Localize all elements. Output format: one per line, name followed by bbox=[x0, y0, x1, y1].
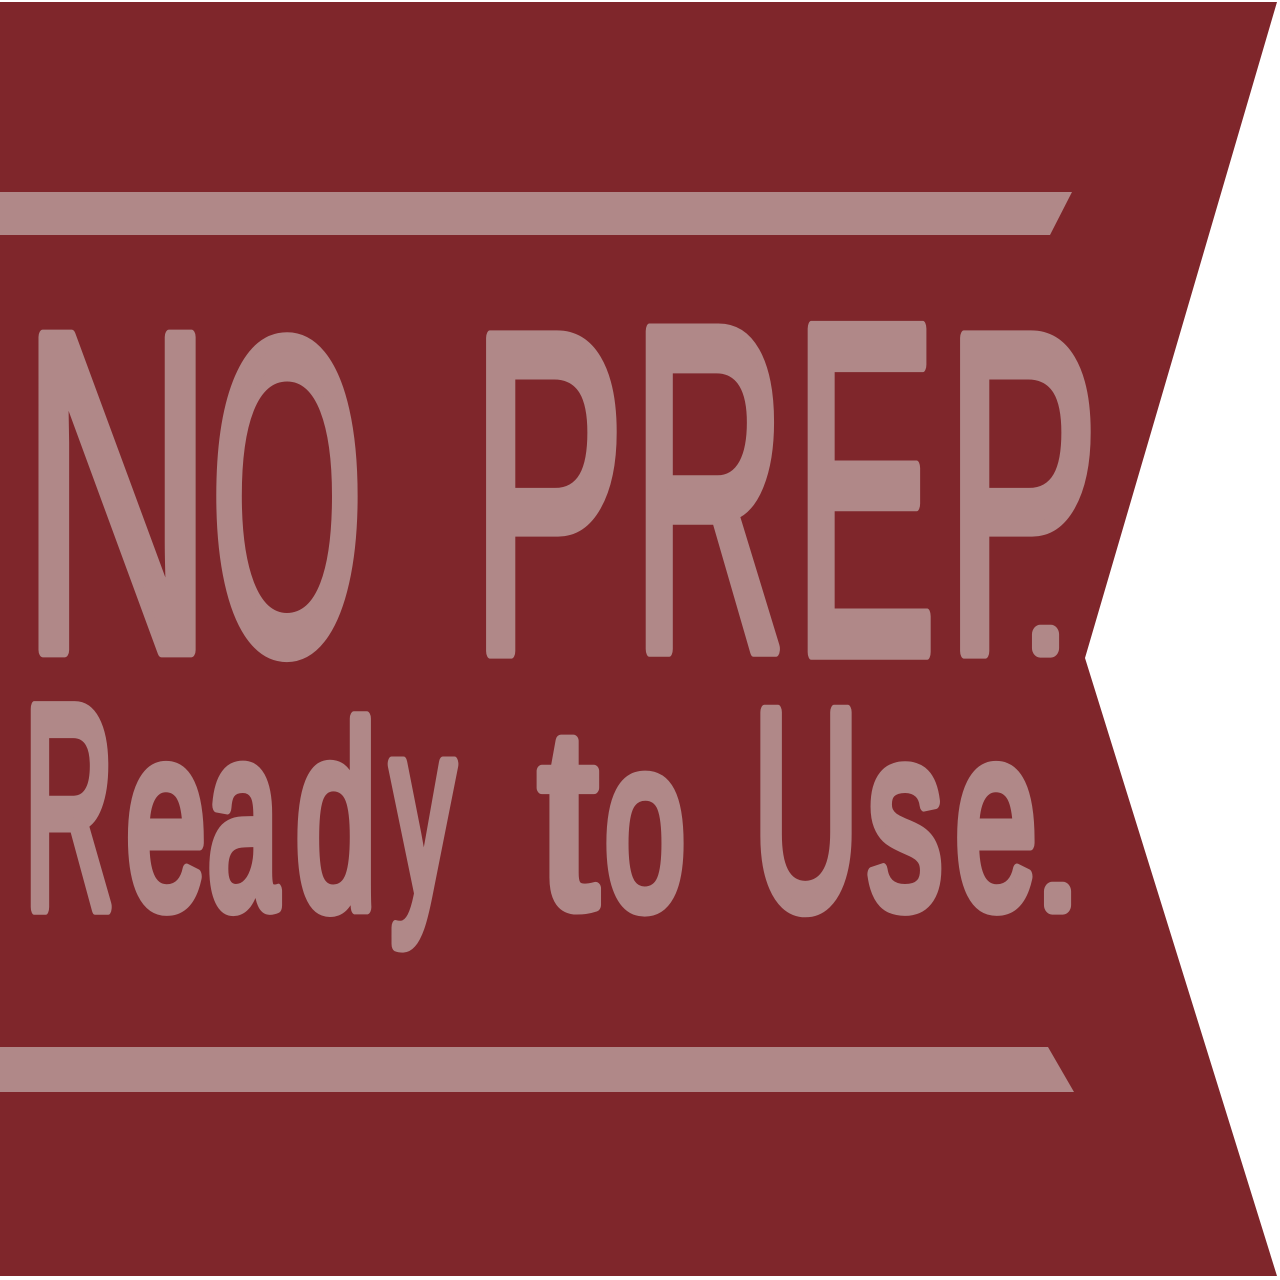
heading line: NO PREP.: E bbox=[794, 227, 936, 752]
heading line: NO PREP.: P bbox=[471, 240, 625, 748]
subheading line: Ready to Use.: y bbox=[391, 673, 455, 947]
heading line: NO PREP.: O bbox=[210, 248, 364, 744]
subheading line: Ready to Use.: U bbox=[753, 651, 859, 967]
heading line: NO PREP.: N bbox=[21, 239, 213, 746]
bottom decorative bar bbox=[0, 1047, 1074, 1092]
heading line: NO PREP.: . bbox=[1030, 534, 1061, 676]
subheading line: Ready to Use.: . bbox=[1042, 791, 1073, 933]
subheading line: Ready to Use.: e bbox=[955, 675, 1037, 961]
heading line: NO PREP.: P bbox=[945, 240, 1099, 748]
subheading line: Ready to Use.: d bbox=[295, 671, 377, 962]
subheading line: Ready to Use.: s bbox=[867, 675, 943, 961]
heading line: NO PREP.: R bbox=[632, 232, 786, 748]
subheading line: Ready to Use.: t bbox=[539, 677, 597, 961]
top decorative bar bbox=[0, 192, 1072, 235]
subheading line: Ready to Use.: a bbox=[208, 674, 279, 960]
heading line: NO PREP. bbox=[21, 227, 1099, 752]
subheading line: Ready to Use. bbox=[24, 648, 1073, 969]
subheading line: Ready to Use.: e bbox=[126, 676, 206, 961]
subheading line: Ready to Use.: o bbox=[605, 692, 685, 959]
subheading line: Ready to Use.: R bbox=[24, 648, 114, 969]
title: NO PREP. Ready to Use. bbox=[21, 227, 1099, 969]
